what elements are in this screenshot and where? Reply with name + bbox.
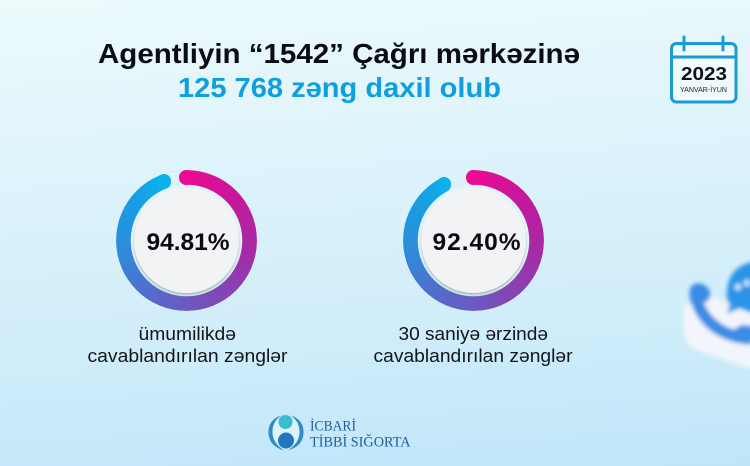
title: 125 768 zəng daxil olub [178,72,501,103]
logo: İcbari Tibbi Sığorta: İCBARİ [310,418,356,434]
label: answered calls: ümumilikdə [138,324,236,344]
donut: 92.40% [403,170,544,311]
icon: calendar 2023: 2023 [681,64,727,84]
donut: 92.40%: 92.40% [432,229,522,256]
label: answered calls: cavablandırılan zənglər [88,346,288,366]
title: Agentliyin “1542” Çağrı mərkəzinə [98,38,580,69]
title [98,38,580,103]
logo: İcbari Tibbi Sığorta: TİBBİ SIĞORTA [310,434,411,450]
label: answered within 30 seconds [374,324,572,366]
label: answered calls [88,324,288,366]
donut: 94.81% [116,170,257,311]
donut: 94.81%: 94.81% [146,229,230,256]
icon: calendar 2023: YANVAR-İYUN [680,85,727,94]
label: answered within 30 seconds: 30 saniyə ərzində [398,324,548,344]
icon: calendar 2023 [670,36,738,104]
label: answered within 30 seconds: cavablandırılan zənglər [374,346,572,366]
